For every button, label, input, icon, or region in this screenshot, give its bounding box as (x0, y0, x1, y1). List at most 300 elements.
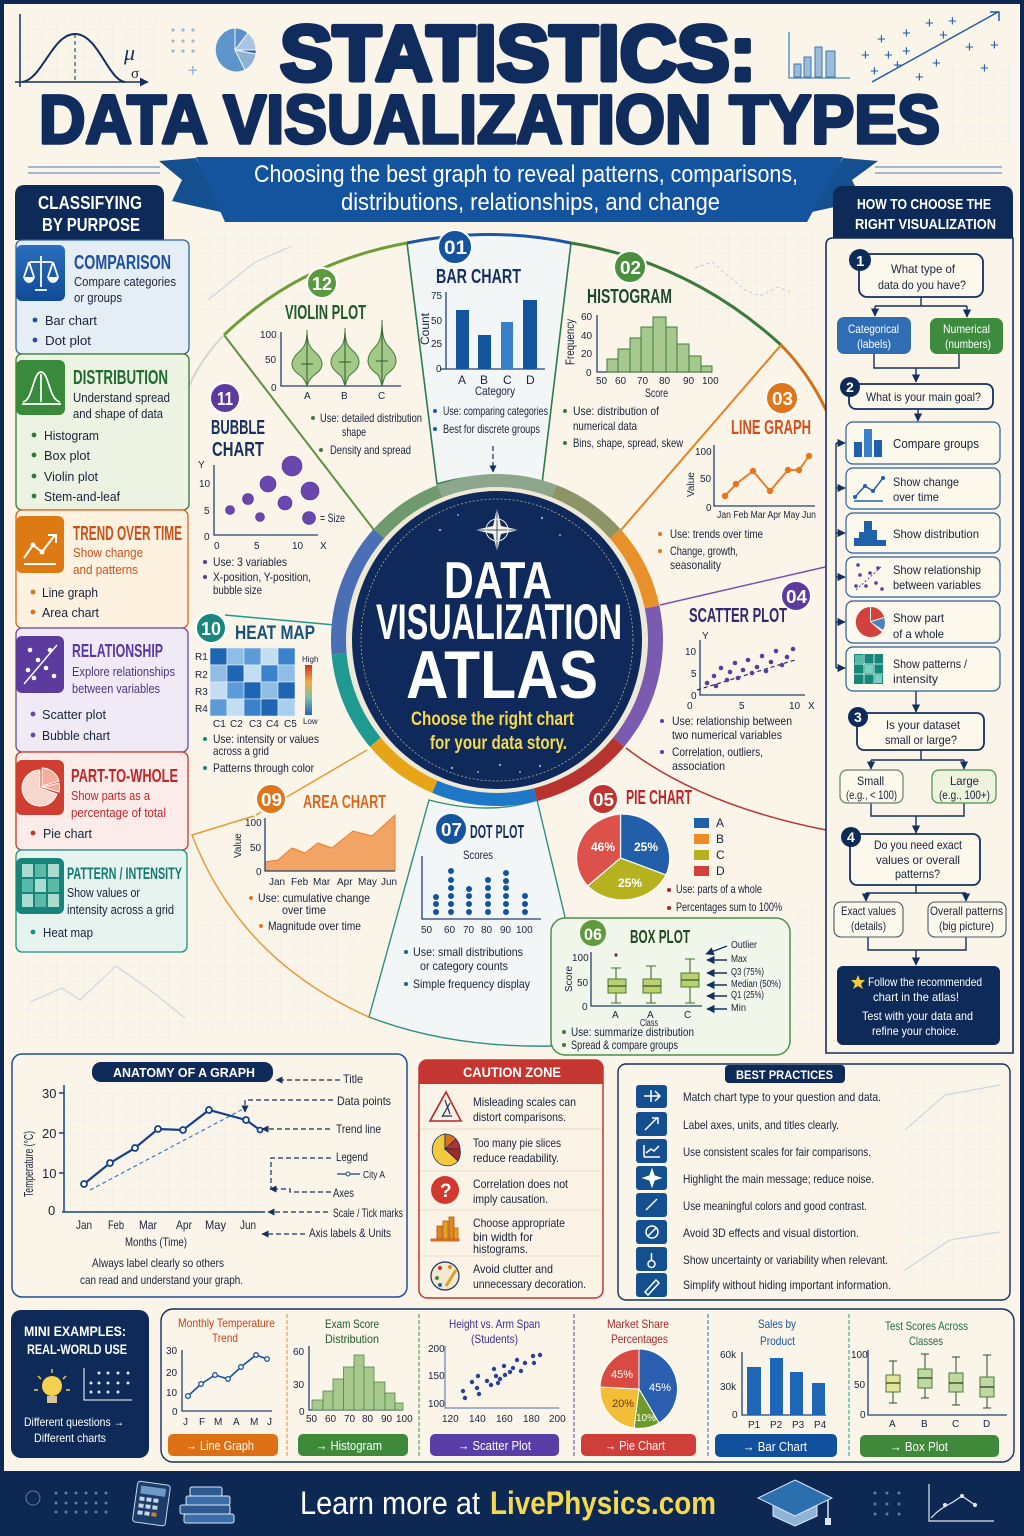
recommendation box (837, 966, 1000, 1045)
notes: or category counts (420, 959, 508, 973)
chart: Class (640, 1018, 658, 1029)
mini intro text: Different charts (34, 1431, 106, 1445)
goal show change: Show change (893, 475, 959, 489)
badge 05 (588, 784, 618, 814)
caution row 4: histograms. (473, 1242, 528, 1256)
mini histogram: 80 (362, 1414, 374, 1425)
mini line graph: 10 (166, 1388, 178, 1399)
chart: 0 (436, 364, 442, 375)
chart: Count (418, 312, 432, 345)
option overall patterns: (big picture) (939, 919, 994, 933)
header icon: scatter with trend: + (877, 31, 886, 48)
chart: 100 (245, 818, 262, 829)
caution row 4: bin width for (473, 1230, 533, 1244)
panel: pattern / intensity: intensity across a grid (67, 902, 174, 917)
practice rows: Use meaningful colors and good contrast. (683, 1199, 867, 1213)
chart: C1 (213, 719, 226, 730)
notes: Simple frequency display (413, 977, 530, 991)
panel: how to choose header: RIGHT VISUALIZATION (855, 216, 996, 233)
header icon: scatter with trend: + (870, 63, 879, 80)
chart: X (320, 541, 327, 552)
caution row 5 (473, 1262, 586, 1291)
chart: C4 (266, 719, 279, 730)
notes: Percentages sum to 100% (676, 900, 782, 914)
mini histogram: Exam Score (325, 1317, 379, 1331)
mini pie: 45% (611, 1369, 633, 1381)
mini bars (720, 1317, 827, 1431)
header icon: scatter with trend: + (902, 43, 911, 60)
mini pie: 10% (636, 1413, 656, 1424)
panel: distribution: Violin plot (44, 469, 98, 484)
anatomy heading (92, 1062, 273, 1082)
option categorical: (labels) (857, 337, 891, 351)
mini scatter: Height vs. Arm Span (449, 1317, 540, 1331)
practice rows: Label axes, units, and titles clearly. (683, 1118, 839, 1132)
panel: comparison: Dot plot (45, 333, 91, 348)
chart: 0 (687, 701, 693, 712)
goal show change: over time (893, 490, 939, 504)
section 06 box plot (551, 918, 790, 1055)
legend (694, 816, 725, 878)
mini histogram: 0 (299, 1407, 305, 1418)
chart: A (647, 1010, 654, 1021)
mini scatter: 100 (428, 1399, 445, 1410)
button line graph: → Line Graph (186, 1438, 254, 1453)
mini scatter: 200 (549, 1414, 566, 1425)
heading: HISTOGRAM (587, 286, 672, 308)
chart: 100 (572, 953, 589, 964)
legend: C (716, 848, 725, 862)
chart: 0 (582, 1002, 588, 1013)
section 10 heat map (195, 613, 319, 775)
mini box plot: Test Scores Across (885, 1319, 968, 1333)
chart: 60 (615, 376, 627, 387)
mini line graph (166, 1316, 275, 1428)
step 4 question (841, 827, 980, 885)
notes (404, 945, 530, 991)
wedge 01 bar chart (407, 234, 571, 484)
anatomy callouts: Trend line (336, 1122, 381, 1136)
goal show change (846, 468, 1000, 509)
mini scatter: (Students) (471, 1332, 518, 1346)
chart: C2 (230, 719, 243, 730)
icon: mini dot grid (84, 1368, 132, 1400)
panel: distribution: Histogram (44, 428, 99, 443)
chart (198, 456, 345, 552)
chart: B (480, 373, 488, 387)
badge 06 (580, 920, 606, 946)
mini scatter: 180 (523, 1414, 540, 1425)
option exact values: Exact values (841, 904, 896, 918)
panel: trend over time: and patterns (73, 562, 138, 577)
notes: Use: summarize distribution (571, 1025, 694, 1039)
icon: compass (475, 508, 519, 552)
subtitle ribbon: distributions, relationships, and change (341, 189, 720, 216)
panel: trend over time: Line graph (42, 585, 98, 600)
chart: 5 (204, 506, 210, 517)
panel: classifying by purpose header (15, 185, 164, 240)
mini bars: P2 (770, 1420, 783, 1431)
caution icon: pie slices (432, 1134, 460, 1166)
central atlas circle: for your data story. (430, 733, 567, 754)
step 2 question (840, 377, 993, 409)
panel: trend over time (16, 510, 188, 628)
chart: = Size (320, 511, 345, 525)
panel: pattern / intensity: Heat map (43, 925, 93, 940)
option large: (e.g., 100+) (939, 788, 990, 802)
mini intro text: Different questions → (24, 1415, 124, 1429)
chart: 10 (685, 647, 697, 658)
practice rows: Avoid 3D effects and visual distortion. (683, 1226, 859, 1240)
header icon: dots (171, 28, 197, 74)
anatomy callouts: City A (363, 1170, 385, 1181)
panel: mini examples charts (161, 1309, 1014, 1462)
legend: A (716, 816, 724, 830)
badge 09: 09 (261, 790, 282, 810)
icon: footer graph (929, 1484, 994, 1521)
chart: R3 (195, 687, 208, 698)
heading: BAR CHART (436, 266, 521, 288)
dividers (287, 1314, 849, 1456)
mini box plot: 0 (860, 1410, 866, 1421)
caution row 2: reduce readability. (473, 1151, 559, 1165)
chart: R2 (195, 670, 208, 681)
central ring segments (339, 482, 655, 798)
step 1 question (849, 249, 983, 297)
chart: Category (475, 384, 515, 398)
chart: A (612, 1010, 619, 1021)
practice icons (636, 1085, 667, 1297)
mini line graph: 30 (166, 1346, 178, 1357)
practice rows: Highlight the main message; reduce noise. (683, 1172, 874, 1186)
chart: 100 (516, 925, 533, 936)
section 01 bar chart (418, 230, 548, 472)
panel: classifying by purpose header: CLASSIFYING (38, 193, 142, 213)
badge 07: 07 (441, 820, 462, 840)
panel: comparison: or groups (74, 290, 122, 305)
subtitle ribbon: Choosing the best graph to reveal patterns, comparisons, (254, 161, 798, 188)
footer call to action: LivePhysics.com (490, 1485, 716, 1521)
chart: Value (233, 833, 244, 858)
chart: 0 (691, 691, 697, 702)
panel: distribution: and shape of data (73, 406, 164, 421)
option small (840, 770, 903, 803)
caution icon: bins (431, 1217, 459, 1241)
panel: comparison: Bar chart (45, 313, 97, 328)
footer call to action: Learn more at (300, 1485, 480, 1521)
relationship text: RELATIONSHIP (72, 641, 163, 661)
mini scatter: 150 (428, 1371, 445, 1382)
panel: pattern / intensity (16, 850, 187, 952)
mini bars: P1 (748, 1420, 761, 1431)
goal show relationship: Show relationship (893, 563, 981, 577)
caution icon: palette (431, 1262, 459, 1290)
mini bars: Product (760, 1334, 796, 1348)
anatomy line chart: Jun (240, 1218, 256, 1232)
recommendation box: refine your choice. (872, 1024, 959, 1038)
chart: Jan Feb Mar Apr May Jun (717, 510, 816, 521)
chart: High (302, 655, 318, 664)
notes (563, 404, 683, 450)
anatomy note: can read and understand your graph. (80, 1273, 243, 1287)
anatomy line chart: Jan (76, 1218, 92, 1232)
chart: X (808, 701, 815, 712)
section 11 bubble chart: CHART (212, 439, 264, 461)
notes: association (672, 759, 725, 773)
anatomy callouts: Title (343, 1072, 363, 1086)
caution row 1: distort comparisons. (473, 1110, 566, 1124)
pie: 25% (618, 876, 642, 890)
notes (660, 714, 792, 773)
mini histogram: 60 (325, 1414, 337, 1425)
chart: 50 (577, 978, 589, 989)
chart: Low (303, 717, 318, 726)
mini histogram: 30 (293, 1380, 305, 1391)
icon: graduation cap (758, 1480, 832, 1526)
anatomy note: Always label clearly so others (92, 1256, 224, 1270)
chart: Feb (291, 877, 309, 888)
practice rows (683, 1090, 891, 1292)
icon: pie (16, 760, 64, 815)
chart: 80 (659, 376, 671, 387)
header icon: scatter with trend: + (948, 13, 957, 30)
mini bars: 30k (720, 1382, 737, 1393)
chart: May (358, 877, 377, 888)
badge 11: 11 (217, 389, 233, 409)
chart (195, 648, 318, 730)
button box plot (860, 1435, 999, 1457)
chart: 0 (256, 867, 262, 878)
chart: 50 (700, 474, 712, 485)
title line 1: STATISTICS: (280, 9, 756, 97)
wedge 07 dot plot (369, 800, 565, 1046)
chart: 60 (444, 925, 456, 936)
title line 2: DATA VISUALIZATION TYPES (39, 81, 940, 158)
anatomy line chart: Temperature (°C) (21, 1131, 36, 1197)
button pie (581, 1434, 696, 1456)
step 3 question: Is your dataset (886, 718, 961, 732)
chart: 80 (481, 925, 493, 936)
mini line graph: 20 (166, 1368, 178, 1379)
caution icon: warning triangle (430, 1092, 461, 1121)
header icon: scatter with trend: + (965, 39, 974, 56)
chart: Mar (313, 877, 331, 888)
chart: 10 (199, 479, 211, 490)
chart: Scores (463, 848, 493, 862)
annotations (706, 940, 781, 1014)
panel: mini examples intro (11, 1310, 149, 1458)
section 05 pie chart (576, 784, 782, 914)
notes: X-position, Y-position, (213, 570, 311, 584)
caution row 4: Choose appropriate (473, 1216, 565, 1230)
heading: AREA CHART (303, 792, 386, 812)
caution heading (419, 1060, 603, 1084)
pie (576, 814, 670, 900)
mini line graph: 0 (172, 1407, 178, 1418)
header icon: scatter with trend: + (884, 47, 893, 64)
section 07 dot plot (404, 814, 541, 991)
notes (433, 404, 548, 436)
panel: part-to-whole: percentage of total (71, 805, 166, 820)
flow connectors (836, 297, 967, 965)
panel: mini examples intro: MINI EXAMPLES: (24, 1323, 126, 1339)
chart: 40 (581, 331, 593, 342)
mini bars: P4 (814, 1420, 827, 1431)
notes: Use: 3 variables (213, 555, 287, 569)
chart: Score (645, 386, 668, 400)
header icon: bell curve: σ (131, 66, 139, 82)
chart: 5 (739, 701, 745, 712)
chart: 25 (431, 339, 443, 350)
panel: comparison: Compare categories (74, 274, 176, 289)
badge 01 (438, 230, 472, 264)
step 4 question: patterns? (895, 867, 940, 881)
header icon: bell curve: μ (123, 40, 135, 65)
notes (562, 1025, 694, 1052)
icon: scales (16, 245, 65, 301)
notes: Spread & compare groups (571, 1038, 678, 1052)
option overall patterns: Overall patterns (930, 904, 1003, 918)
header icon: scatter with trend: + (861, 47, 870, 64)
caution row 5: unnecessary decoration. (473, 1277, 586, 1291)
badge 02: 02 (620, 258, 641, 278)
step 4 question: 4 (847, 829, 855, 845)
distribution text: DISTRIBUTION (73, 367, 168, 389)
badge 03 (766, 382, 798, 414)
mini line graph: M (250, 1417, 258, 1428)
legend: D (716, 864, 725, 878)
mini box plot: 100 (851, 1350, 868, 1361)
chart: 90 (500, 925, 512, 936)
panel: trend over time: Area chart (42, 605, 99, 620)
chart: C (684, 1010, 691, 1021)
chart: C5 (284, 719, 297, 730)
mini histogram: 70 (344, 1414, 356, 1425)
notes: Use: cumulative change (258, 891, 370, 905)
panel: distribution (16, 354, 189, 510)
header icon: scatter with trend: + (990, 37, 999, 54)
chart: 0 (586, 368, 592, 379)
step 1 question: data do you have? (878, 278, 966, 292)
notes: Correlation, outliers, (672, 745, 763, 759)
caution heading: CAUTION ZONE (463, 1064, 561, 1080)
heading: LINE GRAPH (731, 417, 811, 439)
badge 07 (436, 814, 466, 844)
button bars: → Bar Chart (743, 1439, 807, 1454)
mini box plot: B (921, 1419, 928, 1430)
chart (563, 312, 719, 400)
annotations: Q1 (25%) (731, 990, 764, 1001)
notes: over time (282, 903, 326, 917)
mini scatter (428, 1317, 566, 1425)
practice rows: Use consistent scales for fair comparisons. (683, 1145, 871, 1159)
caution row 1 (473, 1095, 576, 1124)
panel: relationship: between variables (72, 681, 160, 696)
mini box plot: A (889, 1419, 896, 1430)
goal show distribution: Show distribution (893, 527, 979, 541)
goal show part: of a whole (893, 627, 944, 641)
footer call to action (300, 1485, 716, 1521)
chart: 10 (292, 541, 304, 552)
recommendation box: Test with your data and (862, 1009, 973, 1023)
badge 10: 10 (201, 619, 221, 639)
mini box plot: Classes (909, 1334, 943, 1348)
mini pie: 20% (612, 1398, 634, 1410)
notes: Patterns through color (213, 761, 314, 775)
chart (233, 815, 397, 888)
footer dots left (26, 1491, 108, 1514)
notes: two numerical variables (672, 728, 782, 742)
step 3 question: small or large? (885, 733, 957, 747)
goal compare groups: Compare groups (893, 436, 979, 451)
chart (421, 848, 541, 936)
anatomy note (80, 1256, 243, 1287)
icon: scatter (16, 636, 64, 693)
badge 06: 06 (584, 925, 602, 944)
panel: distribution: Box plot (44, 448, 90, 463)
caution row 1: Misleading scales can (473, 1095, 576, 1109)
heading: SCATTER PLOT (689, 605, 787, 627)
badge 10 (196, 613, 226, 643)
chart: 90 (683, 376, 695, 387)
step 4 question: Do you need exact (874, 838, 963, 852)
goal show patterns: Show patterns / (893, 657, 968, 671)
annotations: Outlier (731, 940, 758, 951)
chart: Apr (337, 877, 353, 888)
step 2 question: 2 (846, 379, 854, 395)
chart: Jun (381, 877, 397, 888)
mini intro text (24, 1415, 124, 1445)
goal show patterns (846, 647, 1000, 691)
chart: 100 (702, 376, 719, 387)
step 1 question: What type of (891, 262, 956, 276)
mini bars: P3 (792, 1420, 805, 1431)
step 4 question: values or overall (876, 853, 960, 867)
step 1 question: 1 (856, 253, 864, 270)
panel: part-to-whole: Show parts as a (71, 788, 151, 803)
mini box plot (851, 1319, 1007, 1430)
panel: distribution: Stem-and-leaf (44, 489, 120, 504)
step 3 question: 3 (854, 709, 862, 725)
chart: 70 (637, 376, 649, 387)
mini box plot: D (983, 1419, 990, 1430)
best practices heading: BEST PRACTICES (736, 1068, 833, 1082)
option numerical: Numerical (943, 322, 990, 336)
chart: Y (702, 631, 709, 642)
notes: Use: distribution of (573, 404, 660, 418)
notes (203, 732, 319, 775)
chart: 50 (596, 376, 608, 387)
mini histogram: Distribution (325, 1332, 379, 1346)
caution row 5: Avoid clutter and (473, 1262, 553, 1276)
notes: Bins, shape, spread, skew (573, 436, 683, 450)
caution icon: question mark: ? (440, 1181, 452, 1202)
trend text: TREND OVER TIME (73, 523, 182, 545)
mini line graph: J (183, 1417, 188, 1428)
notes: bubble size (213, 583, 262, 597)
heading: BOX PLOT (630, 927, 690, 947)
chart: 60 (581, 312, 593, 323)
header icon: scatter with trend: + (925, 15, 934, 32)
anatomy line chart (21, 1085, 265, 1249)
option overall patterns (928, 902, 1006, 937)
step 2 question: What is your main goal? (866, 390, 981, 404)
anatomy callouts: Scale / Tick marks (333, 1206, 403, 1220)
mini line graph: Monthly Temperature (178, 1316, 275, 1330)
chart: 50 (421, 925, 433, 936)
icon: calculator (132, 1481, 171, 1526)
anatomy heading: ANATOMY OF A GRAPH (113, 1065, 255, 1080)
